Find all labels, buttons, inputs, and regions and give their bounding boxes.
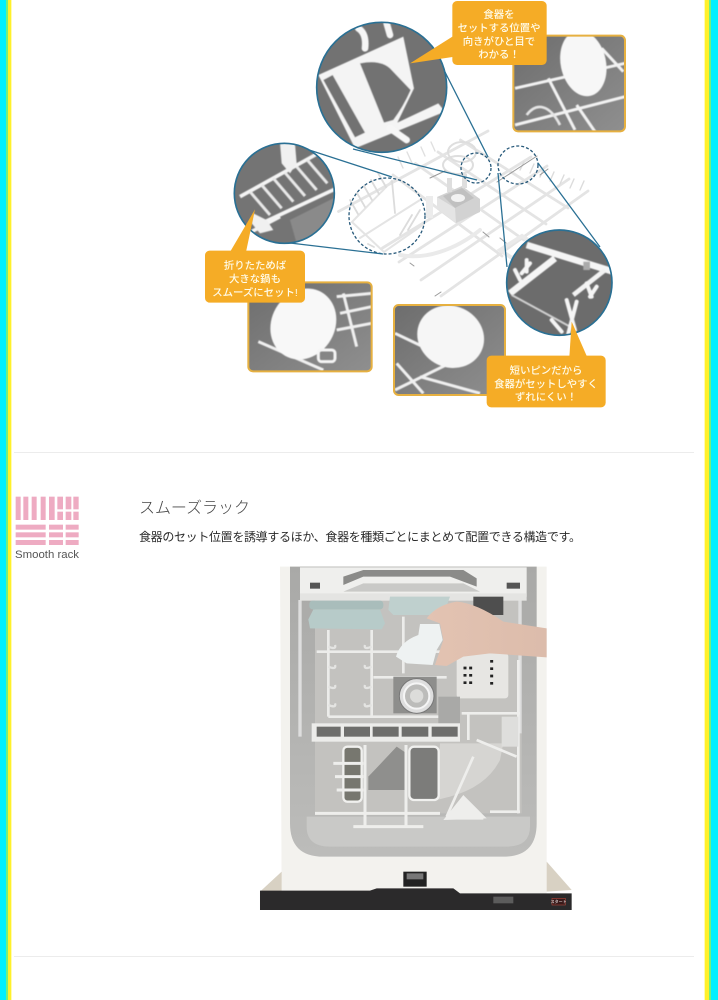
beige side plinths (260, 862, 572, 892)
section description: 食器のセット位置を誘導するほか、食器を種類ごとにまとめて配置できる構造です。 (139, 529, 581, 544)
magnifier: top circle (317, 22, 447, 152)
icon: smooth rack (16, 497, 79, 545)
isometric rack illustration (338, 131, 588, 296)
water box (438, 697, 460, 723)
blue-grey bowl right (388, 597, 450, 615)
tub interior (290, 567, 537, 857)
callout text: left: 大きな鍋も (229, 272, 281, 286)
right side rack (443, 660, 520, 820)
door white frame (280, 567, 547, 893)
lower rack rails (315, 745, 440, 827)
section heading: スムーズラック (139, 499, 250, 517)
black control base (260, 888, 572, 910)
photo: pot left (248, 276, 372, 372)
utensil shelf (312, 723, 460, 742)
photo: bowl bottom centre (394, 295, 505, 395)
display window (493, 897, 513, 903)
large curved plate (437, 743, 503, 800)
lower right basket (409, 747, 439, 800)
magnifier: left circle (234, 143, 337, 243)
callout text: left: スムーズにセット! (212, 286, 298, 299)
dashed highlight circles (349, 146, 538, 254)
lower left basket (343, 747, 362, 802)
callout text: top: わかる！ (478, 49, 520, 61)
door latch (403, 872, 427, 887)
rack diagram panel (205, 1, 625, 407)
perforated panel (457, 653, 508, 698)
lower rack pins (317, 617, 460, 717)
dishwasher photo (260, 567, 572, 910)
tub floor (307, 817, 530, 847)
connector lines (290, 72, 600, 267)
callout text: left: 折りたためば (224, 259, 287, 272)
bowl held in hand (396, 624, 443, 665)
icon caption: Smooth rack (15, 549, 80, 561)
callout text: bottom: 短いピンだから (510, 364, 582, 377)
lower centre filter (368, 747, 407, 790)
right edge colour stripes (704, 0, 718, 1000)
orange callout shapes (205, 1, 606, 407)
callout text: top: 向きがひと目で (463, 35, 535, 48)
photo: bowl top right (513, 26, 625, 132)
divider (14, 956, 694, 957)
callout text: top: セットする位置や (457, 22, 541, 34)
callout text: bottom: ずれにくい！ (515, 392, 577, 404)
plate behind bowl (309, 601, 383, 609)
divider (14, 452, 694, 453)
start button: スタート (551, 898, 567, 904)
central rack hub (426, 174, 480, 223)
centre wash nozzle (393, 677, 437, 713)
magnifier: right circle (507, 230, 613, 335)
dark mesh (473, 597, 503, 615)
upper rack (300, 567, 527, 601)
callout text: bottom: 食器がセットしやすく (494, 378, 598, 390)
callout text: top: 食器を (483, 8, 515, 21)
left edge colour stripes (0, 0, 12, 1000)
side rails (300, 600, 520, 737)
blue-grey bowl left (308, 609, 385, 629)
hand and arm (427, 602, 547, 666)
tub back wall (315, 600, 522, 813)
